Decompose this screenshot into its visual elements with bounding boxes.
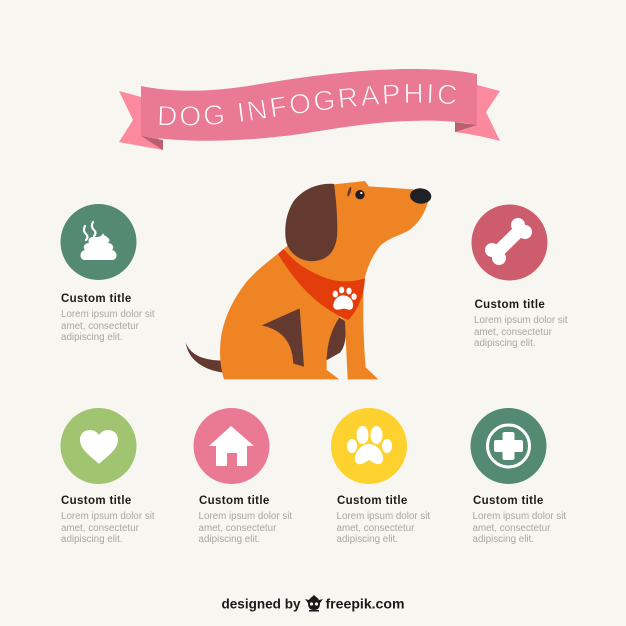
icon: bone (485, 218, 532, 265)
dog eyebrow (347, 186, 352, 197)
dog body and head (220, 181, 428, 379)
bone body text: Lorem ipsum dolor sit (474, 315, 568, 326)
medical body text: adipiscing elit. (472, 534, 534, 545)
medical title: Custom title (473, 495, 544, 507)
footer freepik: freepik.com (326, 596, 404, 612)
footer designed by: designed by (222, 596, 301, 612)
item: bone (472, 204, 568, 349)
bandana paw (333, 287, 357, 310)
house body text: adipiscing elit. (198, 534, 260, 545)
dog thigh patch (262, 308, 304, 367)
item: heart (60, 408, 155, 545)
medical body text: amet, consectetur (472, 523, 551, 534)
icon: medical cross (488, 425, 530, 467)
medical body text: Lorem ipsum dolor sit (472, 511, 566, 522)
item: medical (470, 408, 566, 545)
poop body text: adipiscing elit. (61, 332, 123, 343)
dog tail (186, 343, 223, 373)
dog far belly shadow (326, 317, 346, 361)
footer credit (222, 595, 404, 612)
poop body text: amet, consectetur (61, 321, 140, 332)
house body text: amet, consectetur (198, 523, 277, 534)
dog eye (355, 190, 365, 199)
bone circle (472, 204, 548, 280)
house body text: Lorem ipsum dolor sit (198, 511, 292, 522)
title ribbon (119, 69, 500, 150)
dog bandana (278, 249, 365, 320)
bone title: Custom title (474, 299, 545, 311)
ribbon right tail (455, 85, 500, 141)
poop circle (60, 204, 136, 280)
heart body text: adipiscing elit. (61, 534, 123, 545)
heart body text: amet, consectetur (61, 523, 140, 534)
house title: Custom title (199, 495, 270, 507)
bone body text: adipiscing elit. (474, 338, 536, 349)
paw body text: Lorem ipsum dolor sit (336, 511, 430, 522)
heart circle (60, 408, 136, 484)
icon: house (209, 426, 254, 466)
icon: heart (80, 430, 118, 464)
heart body text: Lorem ipsum dolor sit (61, 511, 155, 522)
paw body text: amet, consectetur (336, 523, 415, 534)
ribbon left tail (119, 91, 163, 150)
item: paw (331, 408, 430, 545)
ribbon right fold (455, 122, 477, 132)
poop body text: Lorem ipsum dolor sit (61, 309, 155, 320)
icon: paw (347, 426, 392, 464)
paw body text: adipiscing elit. (336, 534, 398, 545)
dog illustration (186, 181, 432, 379)
paw title: Custom title (337, 495, 408, 507)
icon: poop (80, 222, 116, 260)
ribbon title text: DOG INFOGRAPHIC (160, 84, 456, 126)
heart title: Custom title (61, 495, 132, 507)
item: house (194, 408, 292, 545)
medical circle (470, 408, 546, 484)
dog ear (285, 184, 337, 261)
dog nose (409, 187, 432, 205)
bone body text: amet, consectetur (474, 327, 553, 338)
poop title: Custom title (61, 293, 132, 305)
item: poop (60, 204, 155, 343)
house circle (194, 408, 270, 484)
paw circle (331, 408, 407, 484)
ribbon left fold (141, 136, 163, 150)
icon: freepik logo (305, 595, 323, 612)
ribbon band (141, 69, 477, 141)
